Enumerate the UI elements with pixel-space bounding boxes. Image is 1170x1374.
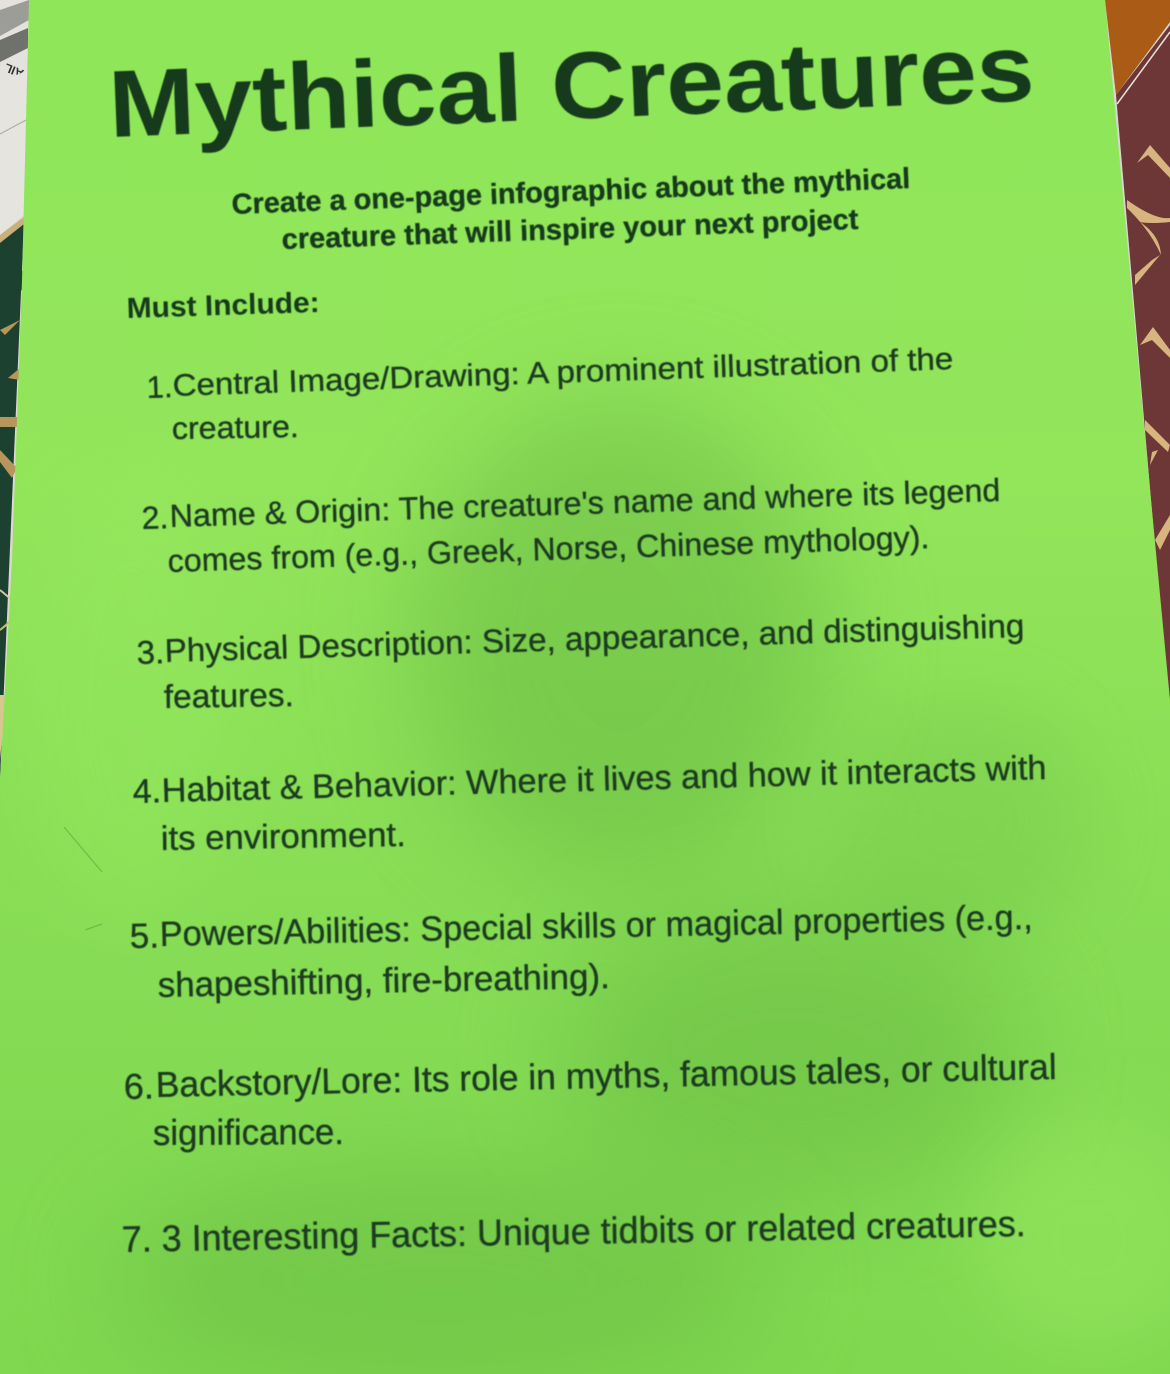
- list item 7: 7. 3 Interesting Facts: Unique tidbits or related creatures.: [121, 1203, 1026, 1260]
- list item 6: 6.: [123, 1065, 154, 1107]
- list item 5: 5.: [129, 916, 159, 956]
- list item 4: 4.: [132, 772, 162, 811]
- white paper behind, top-left: [0, 70, 28, 235]
- list item 4: Habitat & Behavior: Where it lives and how it interacts with: [161, 749, 1047, 810]
- list item 1: Central Image/Drawing: A prominent illustration of the: [172, 341, 954, 403]
- list item 1: [146, 341, 954, 446]
- list item 6: [123, 1046, 1057, 1153]
- banknote corner top-left: AIL: [2, 61, 26, 81]
- list item 4: [132, 749, 1047, 858]
- list item 3: features.: [164, 676, 294, 715]
- subtitle: Create a one-page infographic about the mythical: [231, 163, 911, 221]
- list item 1: creature.: [172, 409, 299, 446]
- list item 3: Physical Description: Size, appearance, and distinguishing: [164, 607, 1025, 669]
- heading: must include: Must Include:: [126, 287, 320, 325]
- green book on left: [0, 217, 24, 780]
- list item 2: Name & Origin: The creature's name and where its legend: [169, 472, 1001, 534]
- list item 5: Powers/Abilities: Special skills or magical properties (e.g.,: [159, 898, 1033, 954]
- subtitle: creature that will inspire your next project: [281, 204, 859, 256]
- subtitle: [231, 163, 911, 256]
- orange and maroon book on right: [1105, 0, 1170, 720]
- list item 6: significance.: [153, 1111, 344, 1153]
- list item 1: 1.: [146, 369, 173, 405]
- list item 4: its environment.: [161, 816, 406, 858]
- list item 6: Backstory/Lore: Its role in myths, famous tales, or cultural: [155, 1046, 1057, 1105]
- banknote corner top-left: [0, 0, 29, 82]
- list item 2: 2.: [141, 499, 169, 536]
- list item 2: [141, 472, 1001, 579]
- list item 3: 3.: [136, 633, 165, 671]
- list item 5: shapeshifting, fire-breathing).: [157, 957, 610, 1005]
- list item 5: [129, 898, 1033, 1005]
- list item 3: [136, 607, 1025, 715]
- list item 2: comes from (e.g., Greek, Norse, Chinese mythology).: [167, 519, 930, 579]
- title: Mythical Creatures: [107, 15, 1036, 158]
